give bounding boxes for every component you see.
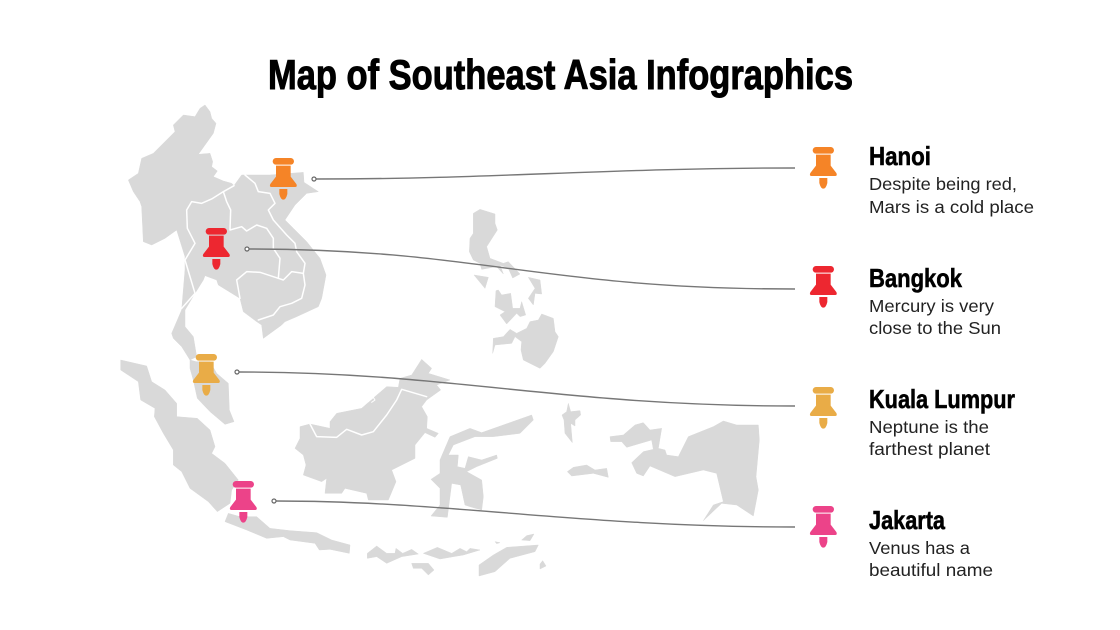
text: Hanoi description [869, 174, 1034, 217]
connector: Jakarta [272, 499, 795, 527]
connector: Kuala Lumpur [235, 370, 795, 406]
icon: red pin [810, 266, 837, 308]
map pin: Kuala Lumpur [193, 354, 220, 396]
item: Bangkok [810, 263, 1001, 338]
item: Kuala Lumpur [810, 384, 1015, 459]
text: Bangkok description: Mercury is very [869, 296, 994, 316]
icon: orange pin [810, 147, 837, 189]
text: Hanoi description: Mars is a cold place [869, 197, 1034, 217]
connector: Bangkok [245, 247, 795, 289]
text: Jakarta description [869, 538, 993, 580]
eastern Indonesia [367, 403, 759, 576]
icon: yellow pin [810, 387, 837, 429]
heading: Jakarta: Jakarta [869, 505, 945, 535]
text: Hanoi description: Despite being red, [869, 174, 1017, 194]
title: Map of Southeast Asia Infographics [268, 51, 853, 98]
icon: pink pin [810, 506, 837, 548]
text: Kuala Lumpur description: farthest planet [869, 439, 990, 459]
mainland Southeast Asia [128, 105, 326, 360]
Borneo [295, 359, 450, 500]
text: Kuala Lumpur description [869, 417, 990, 459]
map pin: Hanoi [270, 158, 297, 200]
map pin: Jakarta [230, 481, 257, 523]
text: Jakarta description: Venus has a [869, 538, 970, 558]
item: Hanoi [810, 141, 1034, 217]
Sumatra, Java and Malay peninsula [121, 360, 350, 553]
map of Southeast Asia [121, 105, 759, 576]
map pin: Bangkok [203, 228, 230, 270]
text: Bangkok description [869, 296, 1001, 338]
item: Jakarta [810, 505, 993, 580]
connector: Hanoi [312, 168, 795, 181]
text: Bangkok description: close to the Sun [869, 318, 1001, 338]
text: Jakarta description: beautiful name [869, 560, 993, 580]
text: Kuala Lumpur description: Neptune is the [869, 417, 989, 437]
heading: Hanoi: Hanoi [869, 141, 931, 171]
heading: Bangkok: Bangkok [869, 263, 962, 293]
heading: Kuala Lumpur: Kuala Lumpur [869, 384, 1015, 414]
Philippines [469, 209, 558, 368]
